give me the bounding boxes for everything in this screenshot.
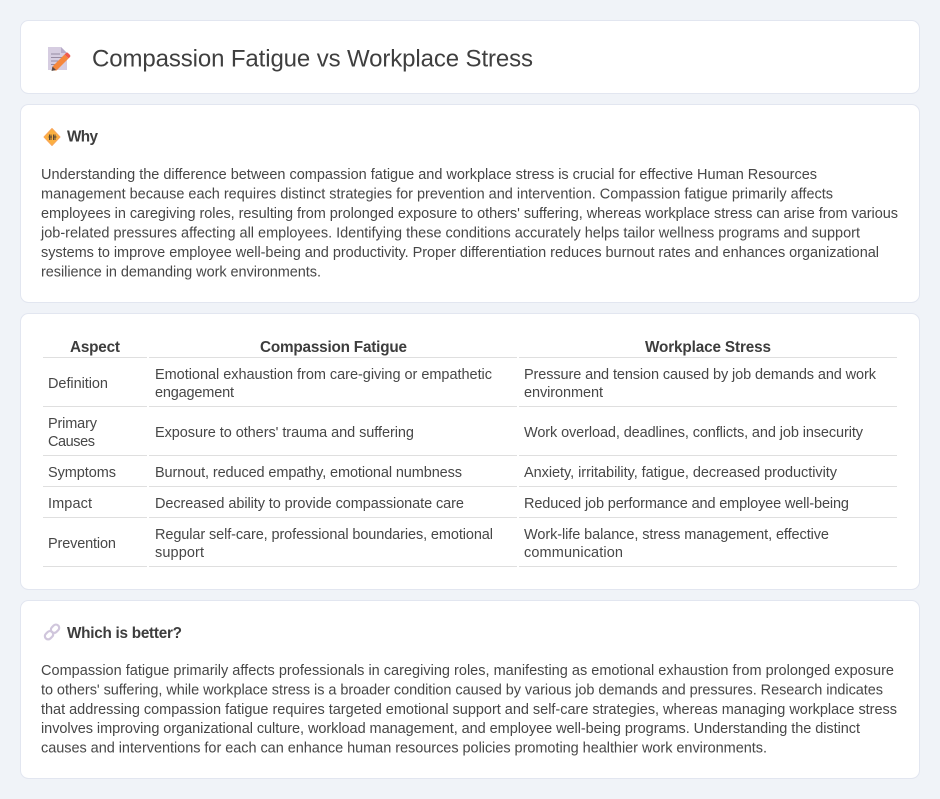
table row: impact: Impact (48, 496, 92, 512)
text block: which is better paragraph (41, 663, 897, 756)
table row: definition: engagement (155, 385, 234, 401)
table row: symptoms (48, 465, 838, 481)
table row: symptoms: Burnout, reduced empathy, emotional numbness (155, 465, 462, 481)
table row: definition: environment (524, 385, 603, 401)
table row: primary causes: Work overload, deadlines, conflicts, and job insecurity (524, 425, 864, 441)
text block: which is better paragraph: that addressing compassion fatigue requires targeted emotional support and self-care strategies, whereas managing workplace stress (41, 702, 897, 718)
table row: prevention: Regular self-care, professional boundaries, emotional (155, 527, 493, 543)
heading: which is better: Which is better? (67, 625, 182, 642)
icon: memo with pencil (48, 47, 70, 71)
panel: why (20, 104, 920, 302)
table row: primary causes: Primary (48, 416, 98, 432)
table header row: Workplace Stress (645, 339, 771, 356)
text block: why paragraph: management because each requires distinct strategies for prevention and intervention. Compassion fatigue primarily affects (41, 186, 833, 202)
text block: why paragraph: systems to improve employee well-being and productivity. Proper differentiation reduces burnout rates and enhances organizational (41, 245, 879, 261)
table row: symptoms: Anxiety, irritability, fatigue, decreased productivity (524, 465, 838, 481)
panel: title header (20, 20, 920, 94)
table row: impact: Reduced job performance and employee well-being (524, 496, 849, 512)
text block: why paragraph: job-related pressures affecting all employees. Identifying these conditions accurately helps tailor wellness programs and support (40, 226, 860, 242)
text block: which is better paragraph: Compassion fatigue primarily affects professionals in caregiving roles, manifesting as emotional exhaustion from prolonged exposure (41, 663, 894, 679)
table row: definition (48, 367, 877, 401)
table row: primary causes: Exposure to others' trauma and suffering (155, 425, 414, 441)
table row: definition: Definition (48, 376, 108, 392)
table row: definition: Emotional exhaustion from care-giving or empathetic (155, 367, 492, 383)
table row: prevention: communication (524, 545, 623, 561)
icon: chain link (44, 623, 61, 641)
text block: which is better paragraph: involves improving organizational culture, workload management, and employee well-being programs. Understanding the distinct (41, 721, 860, 737)
table header row: Compassion Fatigue (260, 339, 407, 356)
table row: prevention (48, 527, 829, 561)
text block: why paragraph: resilience in demanding work environments. (41, 264, 321, 280)
table row: prevention: support (155, 545, 204, 561)
text block: why paragraph (40, 167, 898, 280)
panel: which is better (20, 600, 920, 778)
table row: impact: Decreased ability to provide compassionate care (155, 496, 464, 512)
table row: impact (48, 496, 849, 512)
text block: why paragraph: Understanding the difference between compassion fatigue and workplace stress is crucial for effective Human Resources (41, 167, 817, 183)
table row: primary causes: Causes (48, 434, 95, 450)
table row: symptoms: Symptoms (48, 465, 116, 481)
heading: why: Why (67, 128, 98, 146)
text block: which is better paragraph: causes and interventions for each can enhance human resources policies promoting healthier work environments. (41, 740, 767, 756)
icon: orange diamond sign (44, 128, 60, 146)
table header row (70, 339, 771, 356)
text block: why paragraph: employees in caregiving roles, resulting from prolonged exposure to others' suffering, whereas workplace stress can arise from various (41, 206, 898, 222)
table header row: Aspect (70, 339, 120, 356)
title: Compassion Fatigue vs Workplace Stress (92, 46, 533, 72)
table row: prevention: Prevention (48, 536, 116, 552)
text block: which is better paragraph: to others' suffering, while workplace stress is a broader condition caused by various job demands and pressures. Research indicates (41, 682, 883, 698)
panel: comparison table (20, 314, 920, 590)
table row: prevention: Work-life balance, stress management, effective (524, 527, 829, 543)
table row: primary causes (48, 416, 864, 450)
table row: definition: Pressure and tension caused by job demands and work (524, 367, 877, 383)
